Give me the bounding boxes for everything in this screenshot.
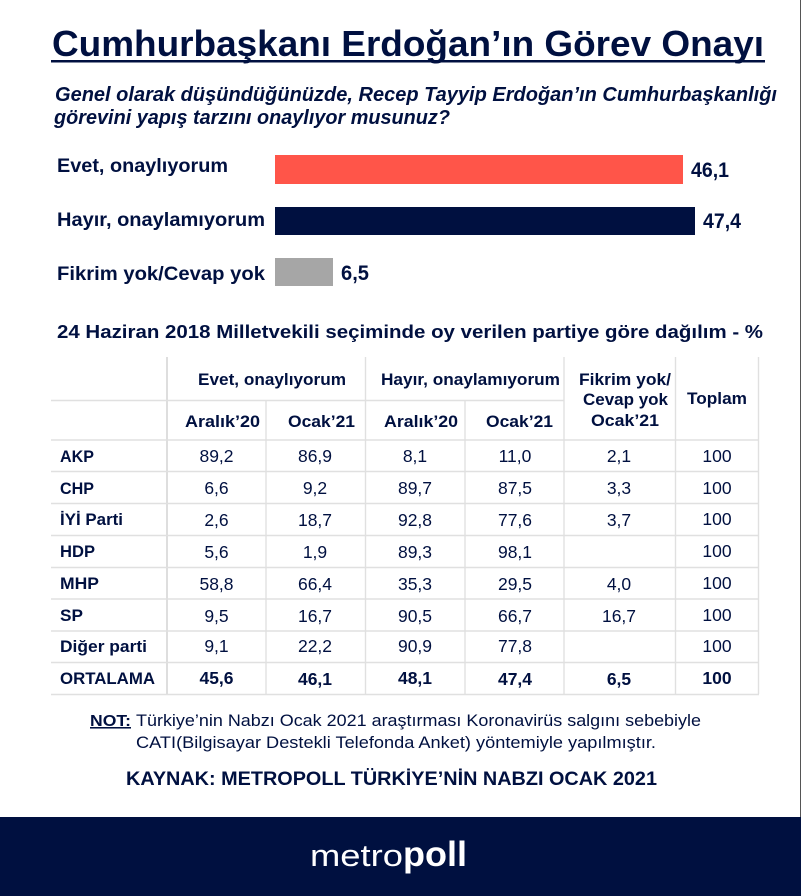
- row: average: 48,1: [398, 668, 432, 688]
- row: HDP: 1,9: [303, 542, 327, 562]
- row: average: ORTALAMA: [60, 670, 155, 688]
- row: AKP: 2,1: [607, 446, 631, 466]
- table header: Cevap yok: [583, 391, 669, 409]
- bar: no opinion: 6,5: [341, 262, 369, 285]
- row: HDP: 89,3: [398, 542, 432, 562]
- row: HDP: [60, 541, 732, 562]
- table header: Ocak’21: [288, 413, 355, 431]
- row: MHP: 4,0: [607, 574, 631, 594]
- row: average: 47,4: [498, 669, 532, 689]
- row: IYI: İYİ Parti: [60, 511, 123, 529]
- row: AKP: [60, 446, 732, 466]
- bar: no: 47,4: [703, 210, 741, 233]
- table header: Aralık’20: [185, 413, 260, 431]
- row: other parties: 77,8: [498, 636, 532, 656]
- logo: metropoll: metro: [310, 838, 403, 873]
- row: SP: 66,7: [498, 606, 532, 626]
- row: CHP: 3,3: [607, 478, 631, 498]
- row: SP: 9,5: [204, 606, 229, 626]
- question text: Genel olarak düşündüğünüzde, Recep Tayyip Erdoğan’ın Cumhurbaşkanlığı: [55, 83, 777, 106]
- row: MHP: [60, 573, 732, 594]
- row: average: 46,1: [298, 669, 332, 689]
- row: average: 6,5: [607, 669, 631, 689]
- row: SP: 16,7: [298, 606, 332, 626]
- row: other parties: 100: [702, 636, 732, 656]
- question text: [53, 83, 777, 129]
- row: MHP: 29,5: [498, 574, 532, 594]
- table header: Aralık’20: [384, 413, 458, 431]
- logo: metropoll: [310, 835, 467, 874]
- title: Cumhurbaşkanı Erdoğan’ın Görev Onayı: [52, 23, 764, 64]
- bar: yes: 46,1: [691, 159, 729, 182]
- row: IYI: 100: [702, 509, 732, 529]
- row: AKP: 89,2: [199, 446, 234, 466]
- row: SP: 90,5: [398, 606, 432, 626]
- table header: Evet, onaylıyorum: [198, 371, 346, 389]
- row: AKP: 100: [702, 446, 732, 466]
- row: other parties: 22,2: [298, 636, 332, 656]
- row: CHP: [60, 478, 732, 498]
- row: AKP: 8,1: [403, 446, 427, 466]
- table header: Toplam: [687, 390, 747, 408]
- table header: Ocak’21: [591, 412, 659, 430]
- row: IYI: [60, 509, 732, 530]
- row: HDP: 98,1: [498, 542, 532, 562]
- note: NOT:: [90, 713, 131, 730]
- row: other parties: Diğer parti: [60, 638, 147, 656]
- row: CHP: 87,5: [498, 478, 532, 498]
- note: CATI(Bilgisayar Destekli Telefonda Anket) yöntemiyle yapılmıştır.: [136, 734, 656, 752]
- table header: Ocak’21: [486, 413, 553, 431]
- row: IYI: 92,8: [398, 510, 432, 530]
- row: HDP: 100: [702, 541, 732, 561]
- row: average: [60, 668, 732, 689]
- row: IYI: 18,7: [298, 510, 332, 530]
- note: Türkiye’nin Nabzı Ocak 2021 araştırması Koronavirüs salgını sebebiyle: [136, 712, 701, 730]
- row: MHP: MHP: [60, 575, 99, 593]
- row: other parties: 90,9: [398, 636, 432, 656]
- row: IYI: 77,6: [498, 510, 532, 530]
- row: AKP: AKP: [60, 448, 94, 466]
- row: MHP: 66,4: [298, 574, 332, 594]
- bar: no: [57, 207, 741, 235]
- row: other parties: [60, 636, 732, 656]
- bar: no: Hayır, onaylamıyorum: [57, 210, 265, 231]
- source: KAYNAK: METROPOLL TÜRKİYE’NİN NABZI OCAK 2021: [126, 767, 657, 790]
- bar: yes: Evet, onaylıyorum: [57, 156, 228, 177]
- bar chart: approval: [57, 155, 741, 286]
- row: CHP: 89,7: [398, 478, 432, 498]
- table header: Hayır, onaylamıyorum: [381, 371, 560, 389]
- row: CHP: 9,2: [303, 478, 327, 498]
- row: SP: 16,7: [602, 606, 636, 626]
- table heading: 24 Haziran 2018 Milletvekili seçiminde oy verilen partiye göre dağılım - %: [57, 321, 763, 342]
- note: [90, 712, 701, 752]
- table header: [185, 371, 747, 431]
- row: SP: 100: [702, 605, 732, 625]
- footer band: [0, 817, 801, 896]
- bar: no opinion: Fikrim yok/Cevap yok: [57, 264, 265, 285]
- row: SP: SP: [60, 607, 83, 625]
- row: CHP: 100: [702, 478, 732, 498]
- row: IYI: 3,7: [607, 510, 631, 530]
- row: AKP: 86,9: [298, 446, 332, 466]
- bar: no opinion: [57, 258, 369, 286]
- logo: metropoll: poll: [403, 835, 467, 874]
- row: CHP: CHP: [60, 480, 94, 498]
- row: average: 45,6: [199, 668, 234, 688]
- table header: Fikrim yok/: [579, 371, 671, 389]
- row: MHP: 58,8: [199, 574, 234, 594]
- row: MHP: 35,3: [398, 574, 432, 594]
- row: AKP: 11,0: [499, 446, 532, 466]
- question text: görevini yapış tarzını onaylıyor musunuz?: [53, 106, 450, 129]
- row: IYI: 2,6: [204, 510, 229, 530]
- row: other parties: 9,1: [204, 636, 229, 656]
- row: MHP: 100: [702, 573, 732, 593]
- row: HDP: HDP: [60, 543, 95, 561]
- table: [51, 357, 759, 694]
- row: SP: [60, 605, 732, 626]
- row: average: 100: [702, 668, 732, 688]
- bar: yes: [57, 155, 729, 184]
- row: HDP: 5,6: [204, 542, 229, 562]
- row: CHP: 6,6: [204, 478, 229, 498]
